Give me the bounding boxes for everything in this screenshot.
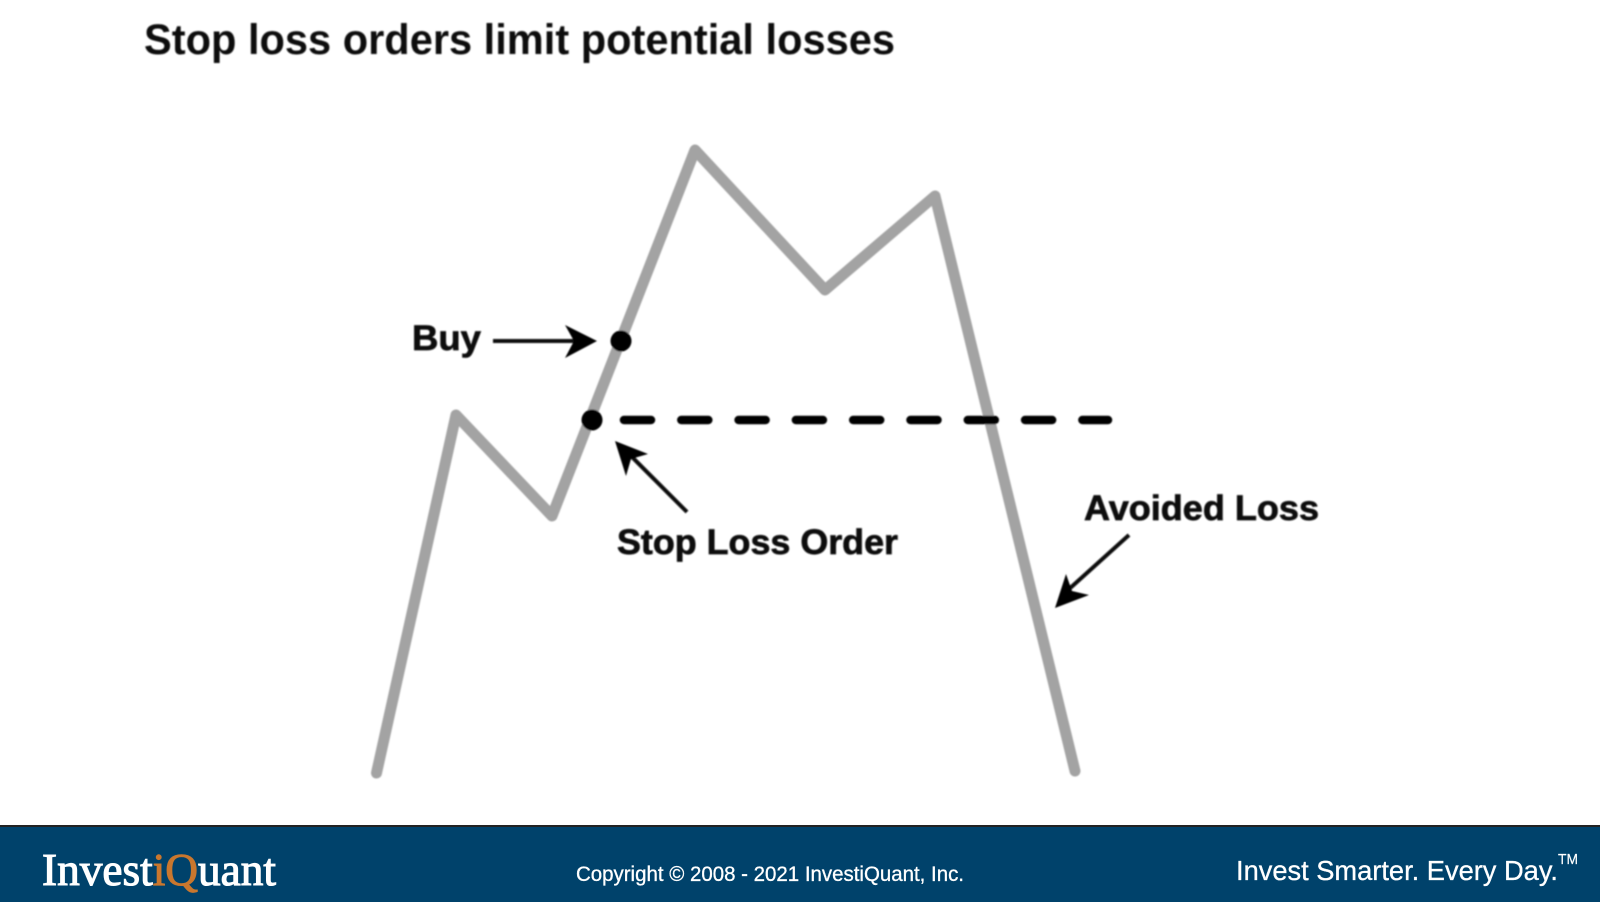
stop loss dashed level bbox=[624, 416, 1108, 424]
arrow: avoided loss bbox=[1055, 535, 1129, 608]
label: stop loss order: Stop Loss Order bbox=[617, 523, 898, 562]
logo: InvestiQuant bbox=[42, 844, 276, 895]
copyright: Copyright © 2008 - 2021 InvestiQuant, Inc. bbox=[576, 863, 964, 886]
title: Stop loss orders limit potential losses bbox=[144, 16, 895, 64]
tagline: Invest Smarter. Every Day. bbox=[1236, 855, 1558, 886]
stop loss point bbox=[582, 410, 602, 430]
label: buy: Buy bbox=[412, 319, 482, 358]
buy point bbox=[610, 330, 632, 352]
label: avoided loss: Avoided Loss bbox=[1084, 489, 1319, 528]
chart: price line with stop loss bbox=[376, 150, 1319, 773]
trademark: TM bbox=[1558, 851, 1578, 868]
arrow: stop loss order bbox=[615, 441, 687, 512]
price line bbox=[376, 150, 1075, 773]
footer bar bbox=[0, 825, 1600, 902]
arrow: buy bbox=[493, 325, 597, 358]
